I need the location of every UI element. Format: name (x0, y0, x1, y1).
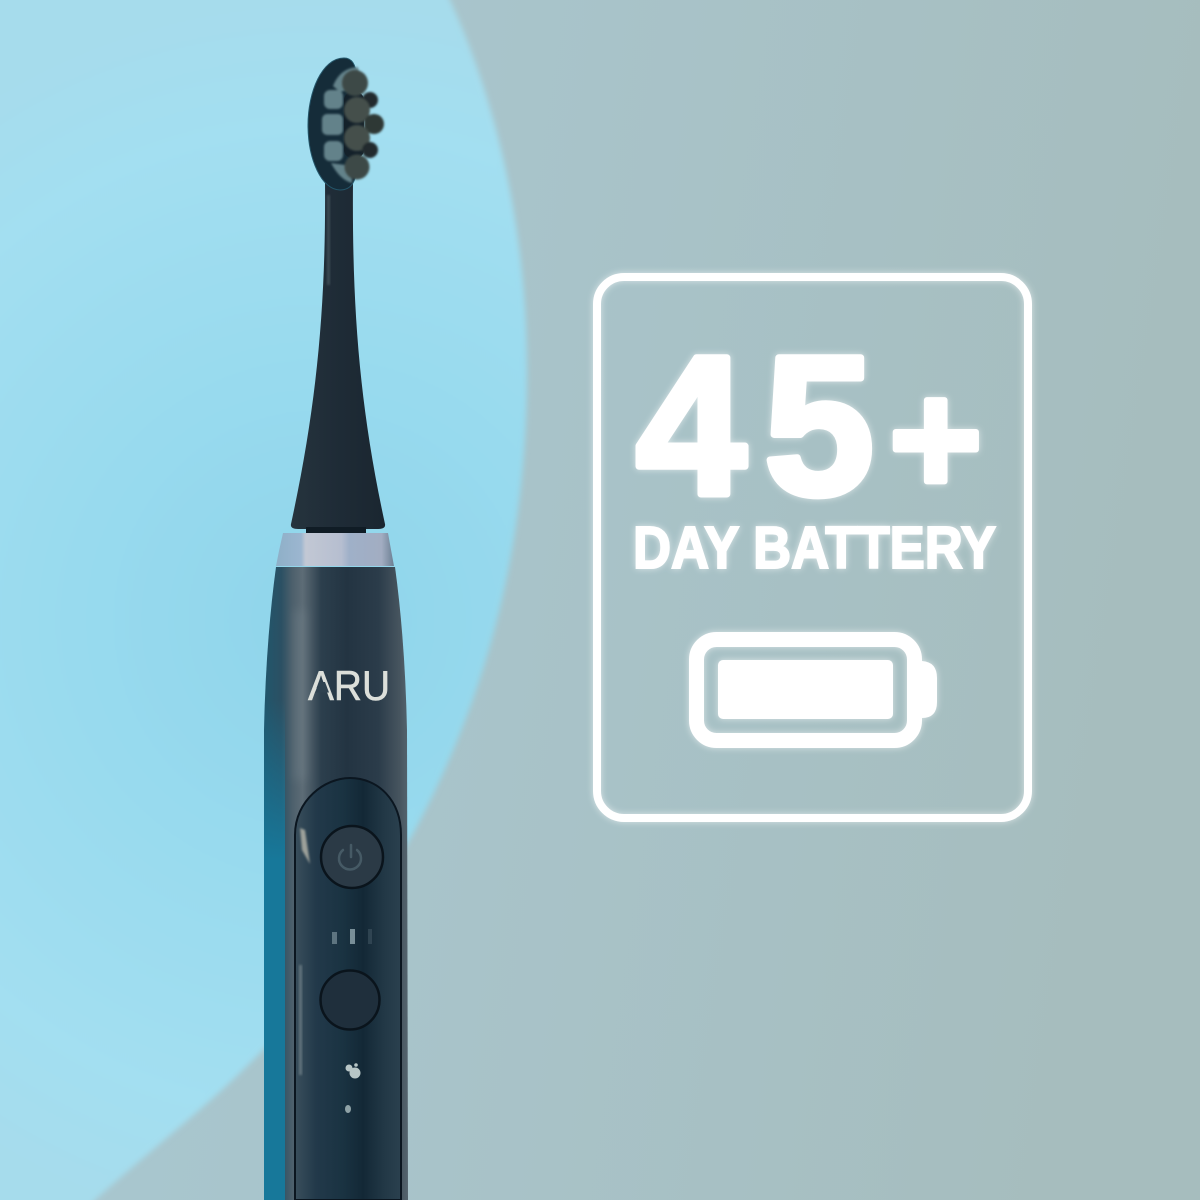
big number: + (889, 349, 982, 528)
control panel (295, 778, 401, 1200)
mode button (320, 970, 380, 1030)
brush head (308, 58, 356, 190)
big number: 5 (764, 315, 874, 536)
badge rounded frame (597, 277, 1028, 818)
dark bristle tufts: front row (342, 70, 384, 180)
logo A crossbar mask (315, 682, 329, 692)
grey bristle tufts: back row (322, 67, 360, 183)
background: bright blue circular spotlight (0, 0, 527, 1200)
bubble icon (346, 1063, 360, 1078)
body left sheen (294, 610, 306, 780)
big number: 4 (636, 315, 746, 536)
battery shell (696, 640, 914, 740)
label: day battery: DAY BATTERY (633, 515, 996, 581)
battery terminal (922, 661, 937, 718)
neck highlight (327, 195, 330, 285)
battery icon (696, 640, 937, 740)
panel reflection streak (300, 828, 310, 864)
dark gaps between tufts (344, 92, 364, 158)
power button (321, 826, 383, 888)
small indicator dot (345, 1105, 351, 1113)
badge: 45+ day battery (597, 277, 1028, 818)
battery charge level (718, 660, 893, 719)
panel reflection lower (299, 965, 302, 1075)
power glyph (339, 845, 361, 869)
teal lower-left reflection (264, 700, 285, 1200)
mode indicator LEDs (332, 929, 372, 944)
ARU logo: ARU (308, 662, 390, 709)
handle body (264, 567, 408, 1200)
collar gap (306, 527, 366, 534)
toothbrush (264, 58, 408, 1200)
metallic ring (276, 533, 394, 566)
brush neck and base (291, 180, 385, 529)
